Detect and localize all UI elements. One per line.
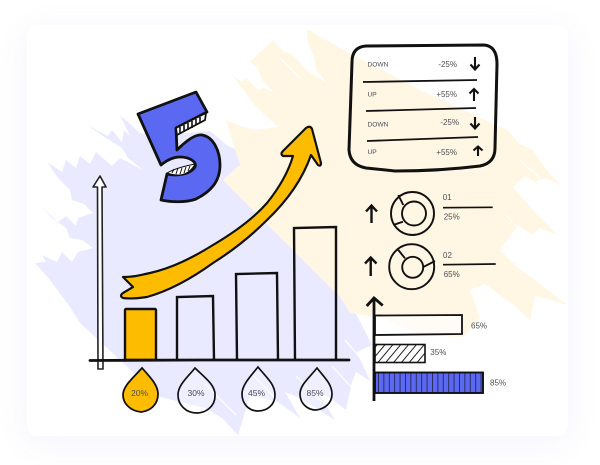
table panel — [349, 45, 497, 171]
row: up 55: UP — [368, 92, 377, 98]
blue brush background — [35, 115, 372, 435]
growth arrow — [121, 127, 321, 298]
row: up 55: +55% — [436, 90, 457, 99]
bar 30% — [177, 296, 214, 360]
vertical axis arrow — [93, 176, 106, 369]
donut row 02: 65% — [444, 270, 460, 279]
bar 85% — [375, 372, 483, 393]
donut row 01: 25% — [444, 212, 460, 222]
row: up 55 second — [368, 146, 482, 157]
drop 85% — [300, 368, 332, 410]
donut row 01 — [366, 192, 493, 235]
horizontal bar chart: 35% — [430, 348, 446, 357]
card background — [27, 25, 568, 436]
donut row 02: 02 — [443, 251, 452, 260]
donut chart — [391, 192, 434, 235]
bar 35% — [375, 344, 425, 362]
yellow brush background — [223, 29, 567, 337]
row: down 25 second: DOWN — [368, 122, 389, 128]
bar 85% — [294, 227, 336, 360]
donut chart — [389, 244, 435, 289]
horizontal bar chart — [367, 298, 506, 401]
drop 20% — [123, 368, 158, 412]
drop 85%: 85% — [306, 388, 324, 398]
drop 45% — [242, 367, 275, 411]
baseline — [90, 359, 349, 362]
number 5 top hatch — [176, 113, 206, 135]
axis arrow — [367, 298, 383, 401]
drop 20%: 20% — [131, 388, 148, 398]
bar chart with upward arrow — [90, 127, 349, 369]
row: down 25: DOWN — [368, 62, 389, 68]
drop 30% — [178, 368, 215, 413]
bar 45% — [236, 273, 278, 360]
up arrow — [366, 206, 377, 223]
bar 20% — [125, 309, 156, 360]
number 5 — [138, 92, 220, 202]
row: up 55 second: UP — [368, 149, 377, 156]
row: down 25 — [368, 57, 480, 70]
horizontal bar chart: 65% — [471, 322, 487, 331]
up arrow — [365, 258, 376, 276]
drop 45%: 45% — [248, 388, 265, 398]
donut row 02 — [365, 244, 496, 289]
bar 65% — [375, 315, 462, 335]
horizontal bar chart: 85% — [490, 379, 506, 388]
row: up 55 second: +55% — [436, 148, 457, 157]
donut row 01: 01 — [443, 193, 452, 202]
row: down 25 second: -25% — [440, 118, 459, 127]
drop labels — [123, 367, 332, 413]
row: up 55 — [368, 89, 478, 101]
drop 30%: 30% — [187, 388, 205, 398]
number 5 lower hatch — [167, 164, 195, 175]
row: down 25 second — [368, 117, 480, 128]
row: down 25: -25% — [438, 60, 457, 69]
